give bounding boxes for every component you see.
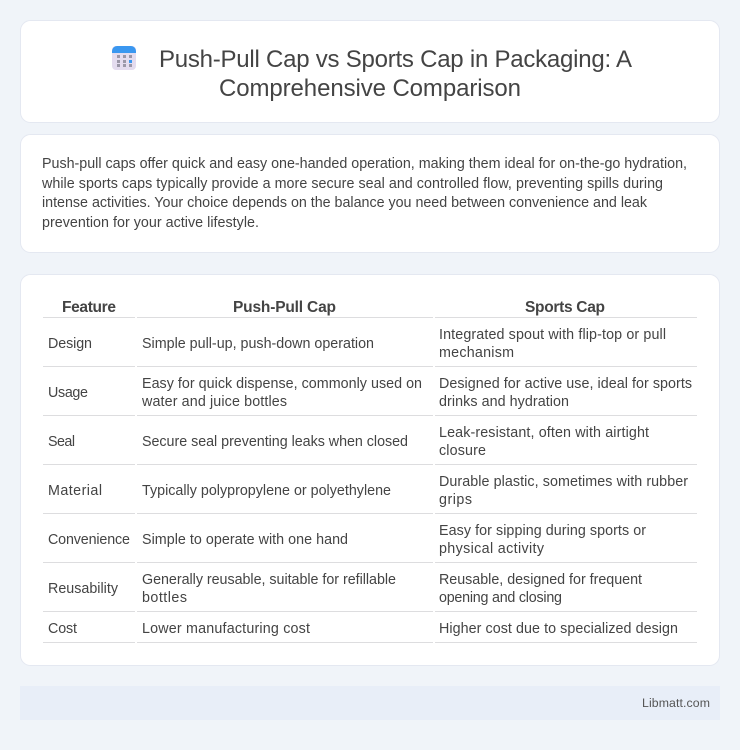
row: convenience: Convenience [48, 532, 130, 548]
row: reusability: Reusability [48, 581, 119, 597]
row: design: Design [48, 336, 92, 352]
panel: header [20, 20, 720, 122]
row: reusability: Generally reusable, suitable for refillable [142, 572, 396, 588]
title: Comprehensive Comparison [219, 75, 521, 102]
row: reusability: Reusable, designed for frequent [439, 572, 642, 588]
row: cost: Lower manufacturing cost [142, 621, 310, 637]
footer: Libmatt.com [642, 696, 710, 710]
row: seal [48, 425, 649, 459]
row: usage: Designed for active use, ideal for sports [439, 376, 692, 392]
intro text [41, 156, 687, 231]
footer [20, 686, 720, 720]
row: cost: Cost [48, 621, 77, 637]
row: reusability [48, 572, 642, 606]
row: usage: drinks and hydration [439, 394, 569, 410]
icon: calendar [112, 46, 136, 70]
row lines [43, 318, 697, 642]
row: seal: Seal [48, 434, 75, 450]
panel: introduction [20, 134, 720, 252]
row: usage: Easy for quick dispense, commonly used on [142, 376, 422, 392]
title [159, 46, 632, 102]
row: cost [48, 621, 678, 637]
row: seal: Secure seal preventing leaks when closed [142, 434, 408, 450]
row: design: mechanism [439, 345, 514, 361]
row: seal: closure [439, 443, 486, 459]
row: cost: Higher cost due to specialized design [439, 621, 678, 637]
row: material: Durable plastic, sometimes with rubber [439, 474, 688, 490]
row: design [48, 327, 666, 361]
row: design: Simple pull-up, push-down operation [142, 336, 374, 352]
row: usage: water and juice bottles [141, 394, 287, 410]
row: material: grips [439, 492, 472, 508]
row: convenience: Easy for sipping during sports or [439, 523, 646, 539]
row: design: Integrated spout with flip-top or pull [439, 327, 666, 343]
table header: Sports Cap [525, 299, 605, 316]
row: convenience [48, 523, 646, 557]
intro text: Push-pull caps offer quick and easy one-handed operation, making them ideal for on-the-go hydration, [42, 156, 687, 172]
title: Push-Pull Cap vs Sports Cap in Packaging: A [159, 46, 632, 73]
row: reusability: opening and closing [439, 590, 562, 606]
row: usage [48, 376, 692, 410]
intro text: prevention for your active lifestyle. [42, 215, 259, 231]
row: material: Typically polypropylene or polyethylene [142, 483, 391, 499]
panel: comparison table [20, 274, 720, 666]
row: usage: Usage [48, 385, 88, 401]
intro text: intense activities. Your choice depends on the balance you need between convenience and leak [42, 195, 648, 211]
row: convenience: Simple to operate with one hand [142, 532, 348, 548]
row: material [48, 474, 688, 508]
table header [62, 299, 605, 316]
row: material: Material [48, 483, 102, 499]
table header: Push-Pull Cap [233, 299, 336, 316]
row: convenience: physical activity [439, 541, 545, 557]
table header: Feature [62, 299, 116, 316]
row: seal: Leak-resistant, often with airtight [439, 425, 649, 441]
intro text: while sports caps typically provide a more secure seal and controlled flow, preventing spills during [41, 176, 663, 192]
row: reusability: bottles [142, 590, 187, 606]
